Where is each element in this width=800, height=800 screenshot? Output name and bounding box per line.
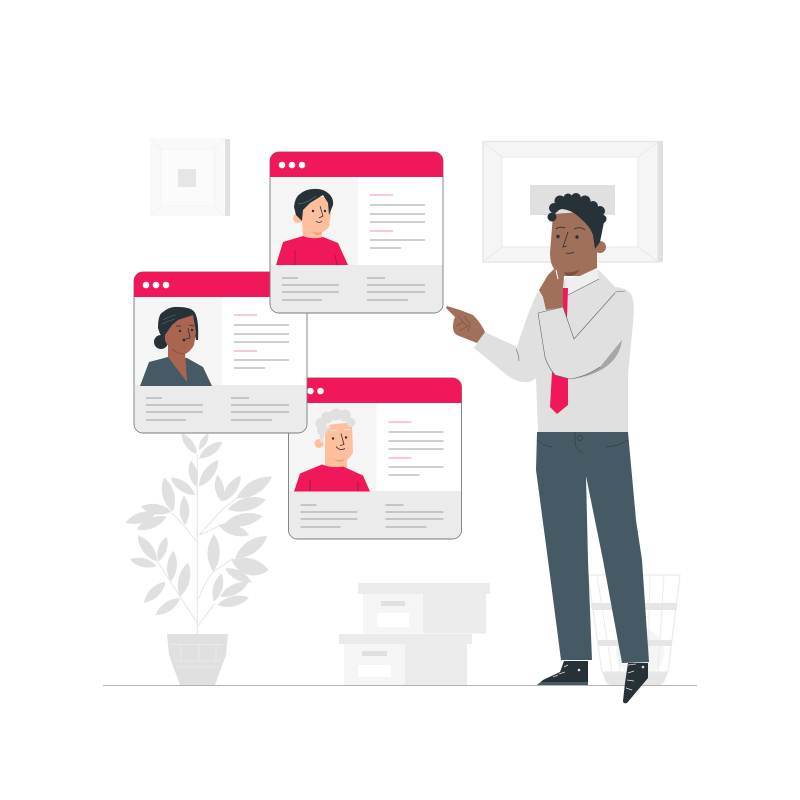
card header [134,272,307,297]
window dots [297,388,324,394]
bio text lines [388,422,444,475]
man: arm shadow [570,340,622,379]
man: collar [565,268,599,295]
man: upper tie [562,288,568,318]
window dots [279,162,305,168]
man: trousers [536,432,649,663]
man: left shoe [537,661,588,685]
ground line [103,684,697,686]
large wall frame [483,141,663,262]
profile card: older man (bottom) [288,378,462,539]
man: right shoe [623,663,648,703]
plant stems [157,454,237,634]
bottom box [339,634,472,685]
card body [288,378,462,539]
card footer [134,385,306,432]
small square wall frame [150,138,230,216]
bio text lines [234,315,289,368]
man: neck and head [550,212,606,276]
card header [270,152,443,177]
man: raised sleeve [538,291,633,379]
footer text lines [300,505,444,527]
man: pointing sleeve [474,293,537,382]
man: pointing hand [446,306,485,343]
man: face details [556,227,585,253]
top box [358,583,490,634]
man: shirt torso [536,270,634,432]
avatar: young man [276,189,348,265]
card body [270,152,443,313]
avatar: older man [294,408,370,492]
plant pot [167,634,228,685]
profile card: woman (left) [134,272,307,433]
card body [134,272,307,433]
profile card: young man (top) [270,152,443,313]
man: hair [548,193,606,249]
card footer [289,491,461,538]
plant leaves [126,433,272,615]
potted plant [126,433,272,685]
card header [288,378,462,403]
man: lower tie [550,372,568,414]
storage boxes [339,583,490,685]
footer text lines [146,398,289,420]
card footer [270,265,442,312]
window dots [143,282,169,288]
avatar: woman [140,307,212,386]
waste basket [588,575,680,685]
footer text lines [282,278,425,300]
bio text lines [370,195,425,248]
man standing and pointing [446,193,649,703]
man: chin hand [539,266,565,310]
